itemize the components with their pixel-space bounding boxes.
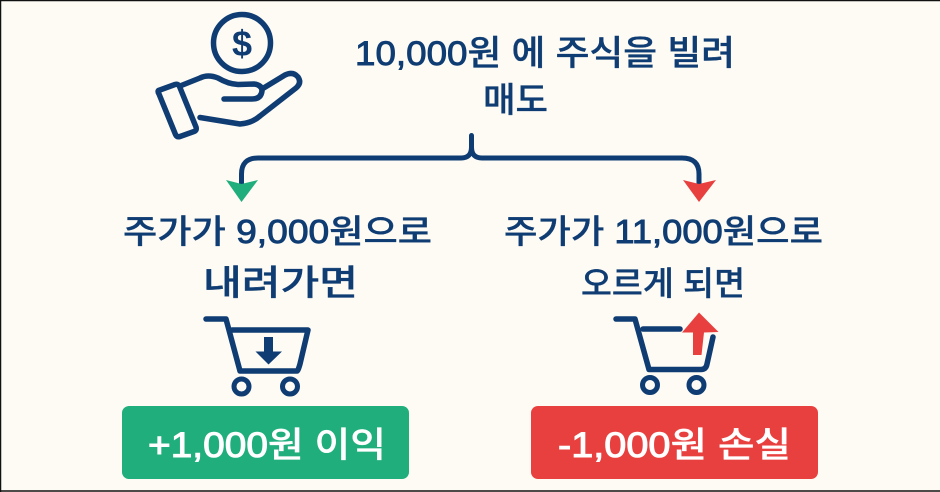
badge: loss: -1,000 원 손실 xyxy=(558,426,791,465)
badge: profit xyxy=(122,406,409,479)
text: price rises scenario: 오르게 되면 xyxy=(581,265,745,302)
text: price rises scenario xyxy=(504,213,823,302)
icon: cart with up arrow xyxy=(616,312,718,392)
badge: loss xyxy=(531,406,818,479)
text: price rises scenario: 주가가 11,000 원으로 xyxy=(504,213,823,250)
text: price falls scenario: 주가가 9,000 원으로 xyxy=(123,213,432,250)
icon: hand holding dollar coin xyxy=(158,14,300,137)
icon: hand holding dollar coin: $ xyxy=(232,23,252,64)
title: 매도 xyxy=(483,82,548,120)
title xyxy=(355,35,735,120)
badge: profit: +1,000 원 이익 xyxy=(148,426,386,465)
text: price falls scenario: 내려가면 xyxy=(203,264,358,303)
text: price falls scenario xyxy=(123,213,432,303)
arrowhead: red down xyxy=(683,180,716,202)
arrowhead: green down xyxy=(226,180,258,202)
arrow: branching connector xyxy=(226,136,716,202)
icon: cart with down arrow xyxy=(206,319,308,394)
title: 10,000원 에 주식을 빌려 xyxy=(355,35,735,73)
